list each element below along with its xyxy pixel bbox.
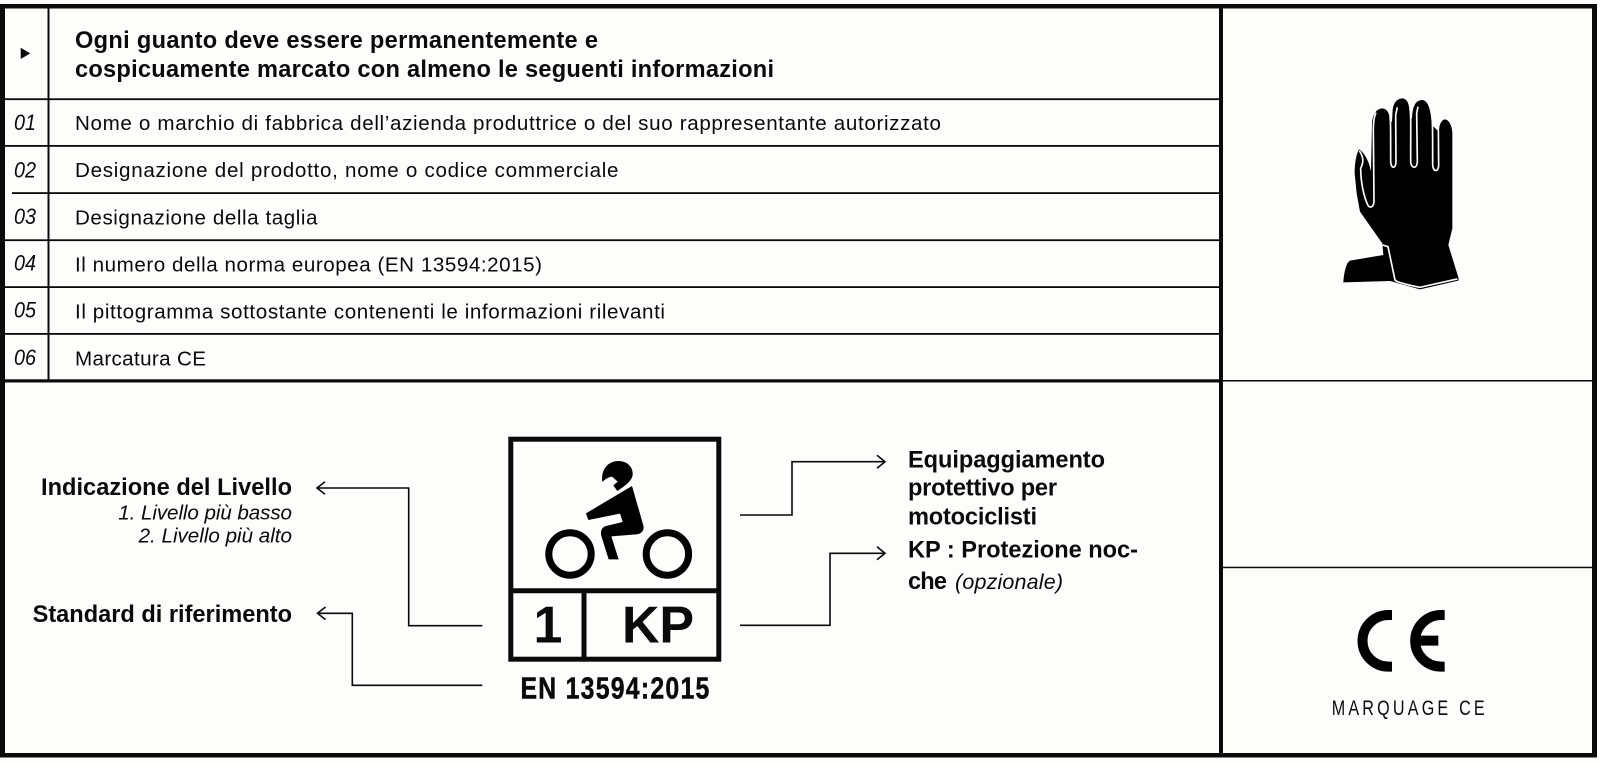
row 03: Designazione della taglia <box>75 206 318 229</box>
row 06: 06 <box>14 345 37 370</box>
arrow: to knuckle protection <box>740 547 885 625</box>
callout: protective equipment: motociclisti <box>908 504 1037 530</box>
callout: knuckle protection <box>908 537 1138 595</box>
row 02: 02 <box>14 158 36 182</box>
row 03: 03 <box>14 204 37 229</box>
heading: cospicuamente marcato con almeno le seguenti informazioni <box>75 57 774 83</box>
row 04: 04 <box>14 251 36 276</box>
heading <box>75 28 774 83</box>
callout: protective equipment: Equipaggiamento <box>908 447 1105 473</box>
icon: header triangle <box>21 48 30 59</box>
standard number: EN 13594:2015 <box>520 671 709 705</box>
callout: knuckle protection: (opzionale) <box>955 570 1063 594</box>
callout: reference standard: Standard di riferimento <box>33 602 292 628</box>
callout: level indication: Indicazione del Livello <box>41 475 292 501</box>
KP code: KP <box>622 597 694 655</box>
arrow: to protective equipment <box>740 455 885 515</box>
heading: Ogni guanto deve essere permanentemente e <box>75 28 598 54</box>
icon: glove <box>1343 98 1459 289</box>
callout: protective equipment <box>908 447 1105 530</box>
icon: CE mark <box>1363 615 1445 667</box>
row 02: Designazione del prodotto, nome o codice commerciale <box>75 159 618 182</box>
callout: knuckle protection: che <box>908 569 947 595</box>
pictogram: motorcyclist label <box>511 439 719 705</box>
icon: rider <box>586 461 644 559</box>
level number: 1 <box>534 597 562 655</box>
callout: knuckle protection: KP : Protezione noc- <box>908 537 1138 563</box>
row 06 <box>14 345 206 370</box>
icon: wheels <box>549 533 689 575</box>
row 05: 05 <box>14 297 37 322</box>
CE caption: MARQUAGE CE <box>1332 697 1485 721</box>
arrow: to level indication <box>317 482 482 626</box>
arrow: to reference standard <box>318 607 482 685</box>
row 01: Nome o marchio di fabbrica dell’azienda produttrice o del suo rappresentante autorizzato <box>75 112 941 135</box>
callout: level indication <box>41 475 292 548</box>
row 04: Il numero della norma europea (EN 13594:2015) <box>75 254 542 276</box>
callout: level indication: 1. Livello più basso <box>118 501 292 524</box>
row 01: 01 <box>14 110 36 135</box>
row 06: Marcatura CE <box>75 348 206 370</box>
row 05: Il pittogramma sottostante contenenti le informazioni rilevanti <box>75 300 665 323</box>
callout: protective equipment: protettivo per <box>908 476 1057 502</box>
pictogram frame <box>511 439 719 659</box>
callout: level indication: 2. Livello più alto <box>138 525 292 548</box>
